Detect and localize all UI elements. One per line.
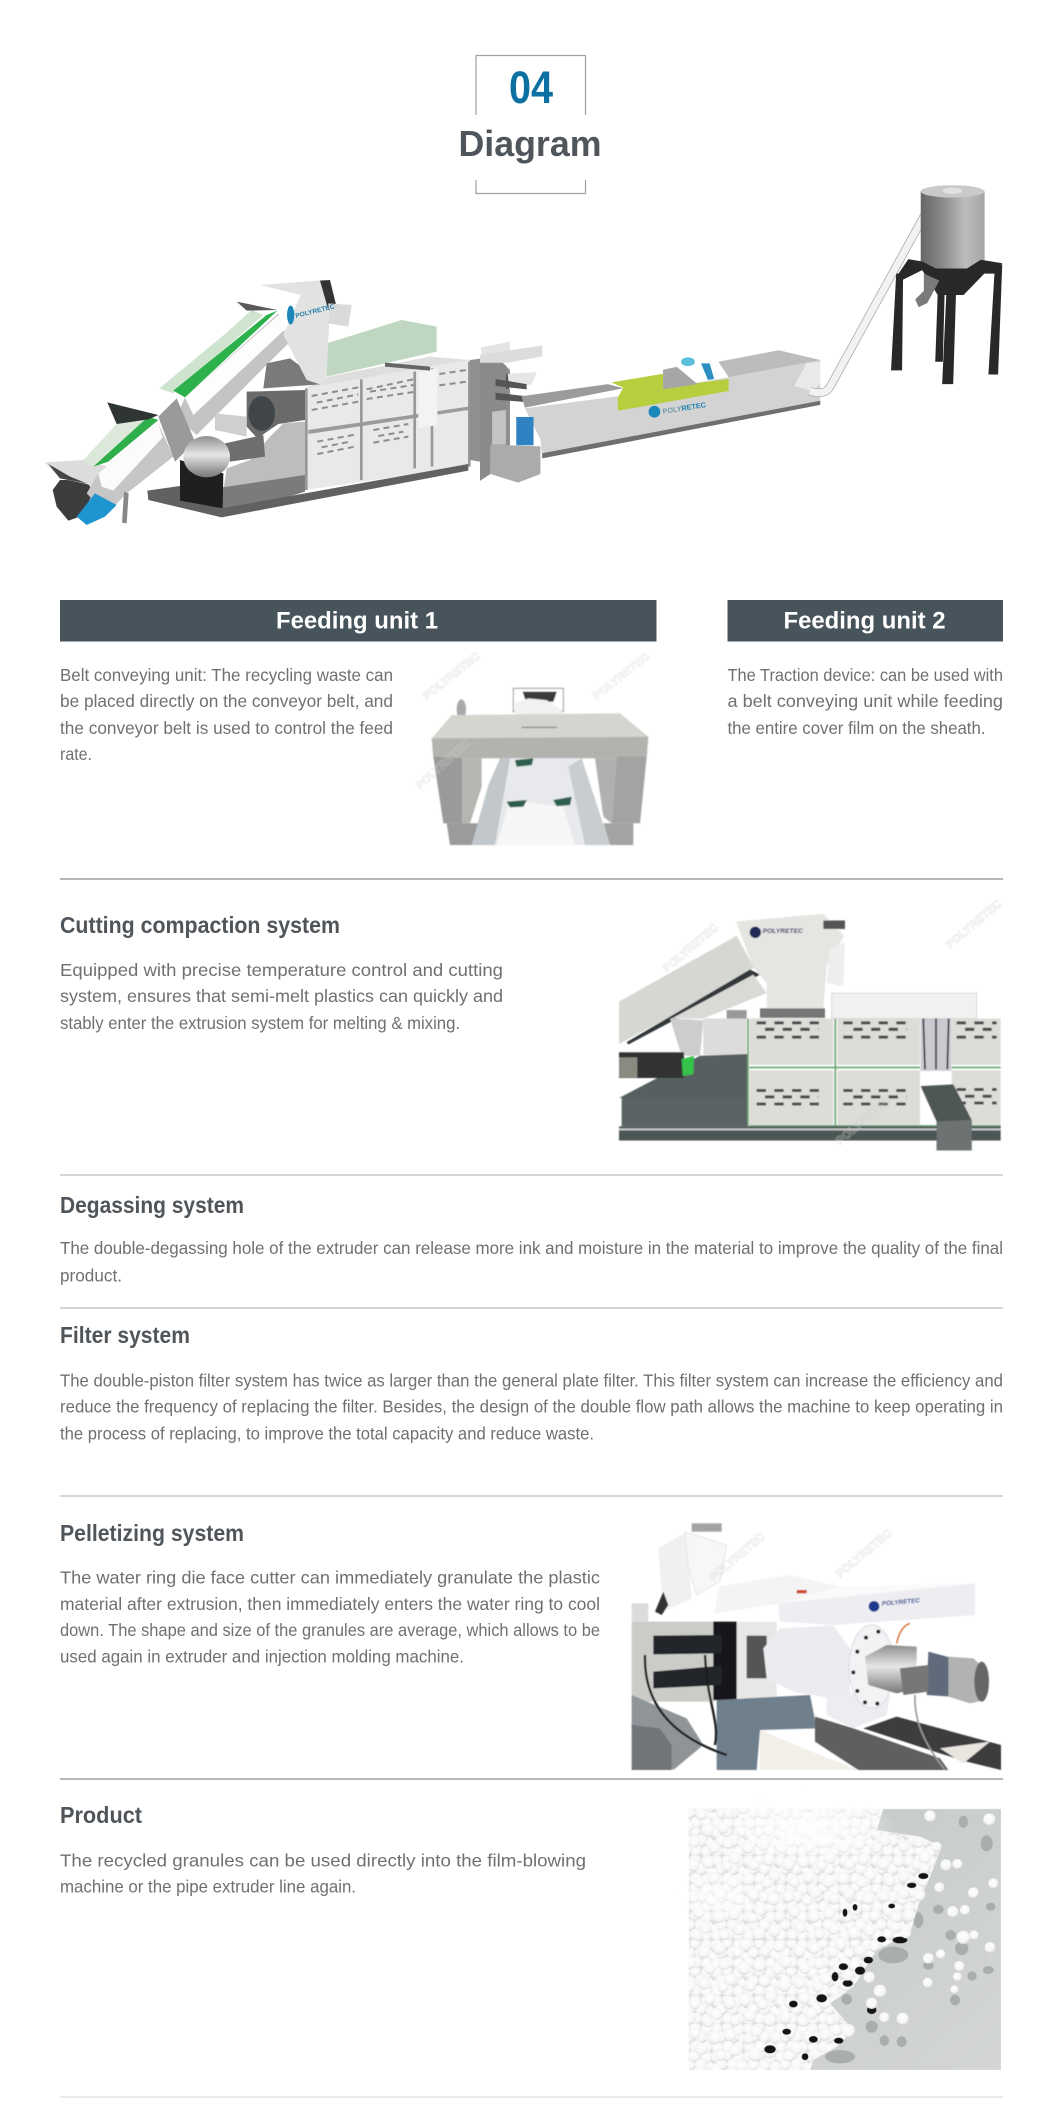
section: pelletizing system text: The water ring die face cutter can immediately granulate the plastic	[60, 1568, 600, 1588]
section: filter system: the process of replacing, to improve the total capacity and reduce waste.	[60, 1424, 594, 1444]
section: pelletizing system text: Pelletizing system	[60, 1520, 244, 1546]
section number: 04	[509, 62, 553, 113]
machine illustration: cooling conveyor and silo	[480, 185, 1002, 483]
section: pelletizing system text: used again in extruder and injection molding machine.	[60, 1646, 464, 1666]
photo: cutting compaction machine	[619, 898, 1004, 1150]
photo: recycled granules	[677, 1792, 1001, 2070]
photo: belt conveying unit: POLYRETEC	[421, 651, 482, 702]
header bar: Feeding unit 1	[60, 600, 656, 642]
text: feeding unit 2 description	[728, 665, 1003, 738]
text: feeding unit 1 description	[60, 665, 393, 764]
photo: pelletizing machine: POLYRETEC	[834, 1528, 894, 1581]
section: product text: Product	[60, 1802, 142, 1828]
section: filter system: The double-piston filter system has twice as larger than the general plate filter. This filter system can increase the efficiency and	[60, 1370, 1003, 1390]
machine illustration: cooling conveyor and silo: POLYRETEC	[662, 400, 707, 416]
photo: belt conveying unit: POLYRETEC	[414, 738, 473, 792]
photo: pelletizing machine: POLYRETEC	[708, 1531, 768, 1584]
section: degassing system: product.	[60, 1266, 122, 1286]
text: feeding unit 1 description: the conveyor belt is used to control the feed	[60, 718, 393, 738]
section: pelletizing system text: material after extrusion, then immediately enters the water ring to cool	[60, 1594, 600, 1614]
section: cutting compaction system text: system, ensures that semi-melt plastics can quickly and	[60, 986, 503, 1006]
photo: belt conveying unit: POLYRETEC	[591, 651, 652, 702]
photo: pelletizing machine: POLYRETEC	[882, 1597, 921, 1608]
machine illustration: left extruder section	[45, 280, 510, 525]
title: Diagram	[458, 123, 602, 164]
section: cutting compaction system text: Equipped with precise temperature control and cutting	[60, 960, 503, 980]
text: feeding unit 1 description: Belt conveying unit: The recycling waste can	[60, 665, 393, 685]
title frame	[476, 56, 586, 194]
text: feeding unit 2 description: a belt conveying unit while feeding	[728, 691, 1003, 711]
section: cutting compaction system text	[60, 912, 503, 1033]
section: filter system: reduce the frequency of replacing the filter. Besides, the design of the double flow path allows the machine to keep operating in	[60, 1396, 1003, 1416]
text: feeding unit 1 description: rate.	[60, 744, 92, 764]
section: pelletizing system text: down. The shape and size of the granules are average, which allows to be	[60, 1620, 600, 1640]
header bar: Feeding unit 2	[728, 600, 1003, 642]
header bar: Feeding unit 2: Feeding unit 2	[784, 608, 946, 634]
machine illustration: left extruder section: POLYRETEC	[295, 303, 336, 320]
photo: cutting compaction machine: POLYRETEC	[661, 921, 721, 975]
section: degassing system: Degassing system	[60, 1192, 244, 1218]
section: pelletizing system text	[60, 1520, 600, 1666]
photo: cutting compaction machine: POLYRETEC	[944, 898, 1004, 952]
header bar: Feeding unit 1: Feeding unit 1	[276, 608, 438, 634]
text: feeding unit 2 description: The Traction device: can be used with	[728, 665, 1003, 685]
section: cutting compaction system text: stably enter the extrusion system for melting & mixing.	[60, 1013, 460, 1033]
section: product text	[60, 1802, 586, 1896]
section title block	[458, 56, 602, 194]
section: degassing system	[60, 1192, 1003, 1286]
text: feeding unit 1 description: be placed directly on the conveyor belt, and	[60, 691, 393, 711]
photo: cutting compaction machine: POLYRETEC	[834, 1094, 894, 1148]
photo: cutting compaction machine: POLYRETEC	[763, 928, 803, 935]
photo: pelletizing machine	[632, 1523, 1001, 1770]
section: product text: machine or the pipe extruder line again.	[60, 1876, 356, 1896]
photo: belt conveying unit	[414, 651, 652, 845]
text: feeding unit 2 description: the entire cover film on the sheath.	[728, 718, 986, 738]
section: cutting compaction system text: Cutting compaction system	[60, 912, 340, 938]
section: filter system	[60, 1322, 1003, 1444]
section: degassing system: The double-degassing hole of the extruder can release more ink and moisture in the material to improve the quality of the final	[60, 1238, 1003, 1258]
section: filter system: Filter system	[60, 1322, 190, 1348]
section: product text: The recycled granules can be used directly into the film-blowing	[60, 1850, 586, 1870]
